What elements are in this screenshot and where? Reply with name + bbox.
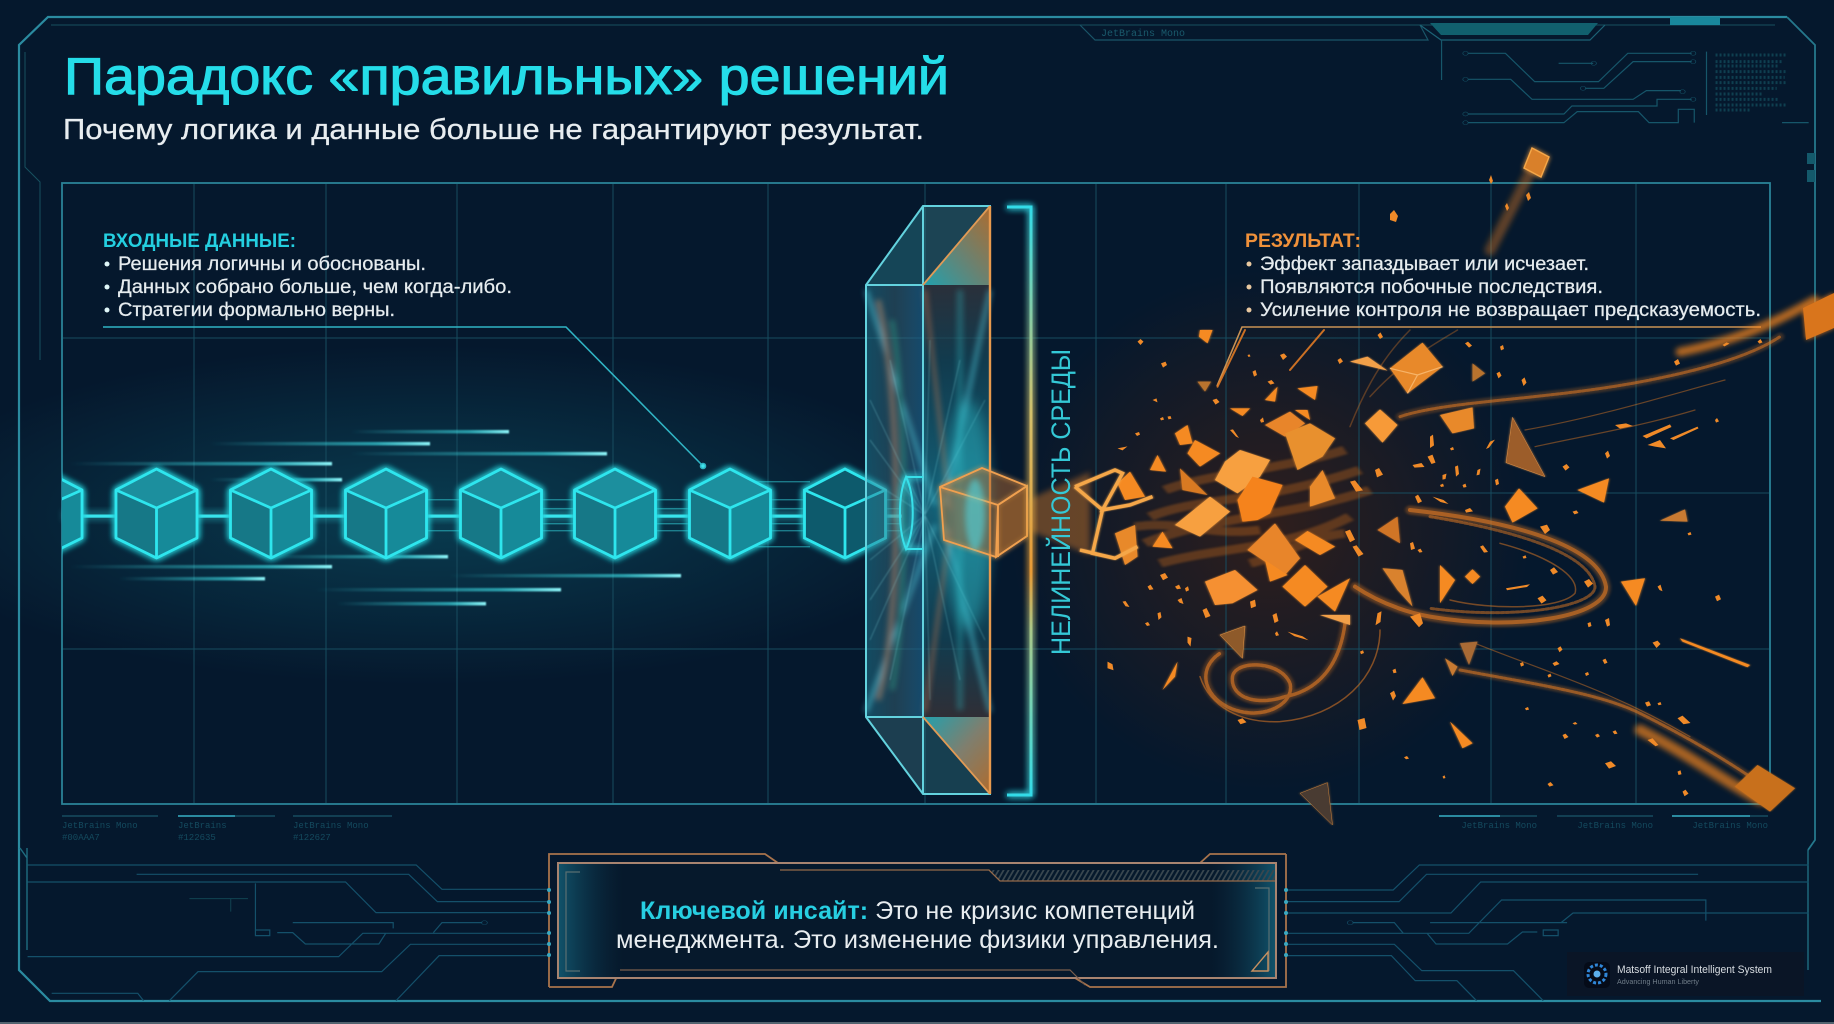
chain connector lines [62,481,902,547]
subtitle: Почему логика и данные больше не гарантируют результат. [63,114,924,146]
vertical label: НЕЛИНЕЙНОСТЬ СРЕДЫ [1045,349,1076,655]
main chart panel [62,183,1770,804]
axis captions right: JetBrains Mono [1692,821,1768,831]
background glow: explosion [1000,260,1560,800]
result text block [1245,231,1761,321]
refracted lens cube [900,477,923,549]
medium bracket [1007,207,1031,795]
input data text block: Данных собрано больше, чем когда-либо. [118,277,512,298]
axis captions right: JetBrains Mono [1461,821,1537,831]
orange cube emerging [940,468,1027,557]
axis captions left [62,816,392,843]
debris particles [1108,332,1762,796]
stray sparks above panel [1390,175,1531,222]
orange beam from cube to shards [1027,472,1090,555]
callout: key insight: менеджмента. Это изменение физики управления. [616,926,1219,954]
result text block: Эффект запаздывает или исчезает. [1260,254,1589,275]
decorative circuit: top right [1442,40,1809,125]
outer HUD frame: JetBrains Mono [1101,28,1185,40]
axis captions left: #122635 [178,833,216,843]
right flying cube [1803,293,1834,340]
input data text block [103,231,512,321]
background glow: data stream [0,300,1050,730]
result text block: Появляются побочные последствия. [1260,277,1603,298]
result text block: Усиление контроля не возвращает предсказуемость. [1260,300,1761,321]
cyan refraction core [965,479,985,551]
ember dust cloud [1135,450,1370,563]
circuit traces: bottom right [1286,865,1808,1001]
result leader line [1217,327,1761,386]
speed lines [70,430,681,605]
logo badge: Advancing Human Liberty [1617,977,1699,986]
input leader line [103,327,706,468]
axis captions left: JetBrains Mono [62,821,138,831]
input data text block: Решения логичны и обоснованы. [118,254,426,275]
bottom edge strip [0,1022,1834,1024]
axis captions left: #00AAA7 [62,833,100,843]
callout: key insight: Ключевой инсайт: Это не кризис компетенций [640,897,1195,925]
axis captions right: JetBrains Mono [1577,821,1653,831]
axis captions left: JetBrains [178,821,227,831]
prism: nonlinear medium [866,206,992,794]
explosion: swirls and fragments [1075,330,1795,825]
input data text block: Стратегии формально верны. [118,300,395,321]
result text block: РЕЗУЛЬТАТ: [1245,231,1361,252]
callout: key insight [547,854,1288,987]
shattered cube outline [1075,470,1152,558]
logo badge: Matsoff Integral Intelligent System [1617,964,1772,976]
circuit traces: bottom left [28,865,548,1001]
axis captions right [1439,816,1768,831]
orange trails [1490,172,1815,800]
axis captions left: JetBrains Mono [293,821,369,831]
axis captions left: #122627 [293,833,331,843]
data cubes chain [1,469,886,558]
title: Парадокс «правильных» решений [64,48,949,106]
top flying cube [1524,148,1549,177]
logo badge [1567,952,1804,996]
input data text block: ВХОДНЫЕ ДАННЫЕ: [103,231,296,252]
